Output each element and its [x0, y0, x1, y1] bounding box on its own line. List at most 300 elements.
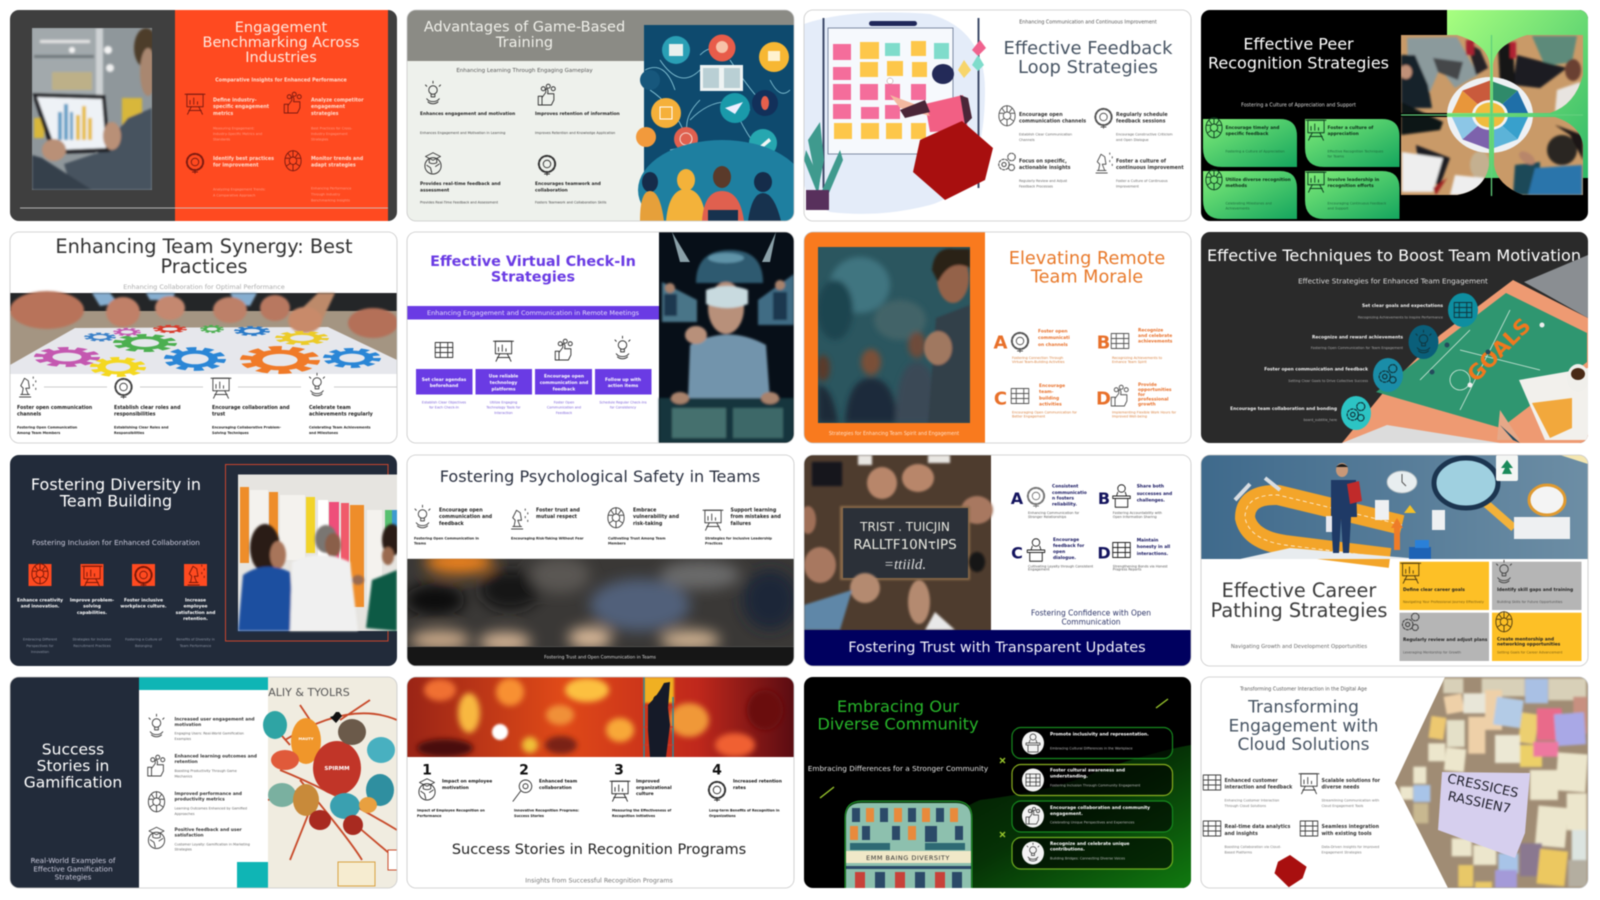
heading: Promote inclusivity and representation. — [1050, 732, 1149, 738]
heading: assessment — [420, 188, 449, 194]
item 3 — [148, 791, 247, 816]
icon: gear — [132, 564, 155, 586]
navy panel — [10, 677, 139, 888]
icon: person — [1022, 732, 1044, 754]
caption: Channels — [1019, 138, 1035, 142]
icon: panel — [1203, 775, 1221, 790]
caption: Leveraging Mentorship for Growth — [1403, 650, 1461, 654]
heading: productivity metrics — [174, 796, 225, 802]
title: Pathing Strategies — [1211, 599, 1387, 622]
item 4 — [1300, 821, 1380, 855]
photo: sticky-note wall: CRESSICES — [1446, 772, 1520, 801]
heading: and innovation. — [21, 604, 60, 610]
heading: vulnerability and — [633, 514, 680, 520]
step 2 — [513, 762, 579, 818]
caption: Open Information Sharing — [1113, 515, 1157, 519]
icon: brain — [285, 151, 301, 171]
title: Team Building — [59, 492, 172, 511]
caption: Team Performance — [179, 644, 211, 648]
heading: solving — [83, 604, 101, 610]
icon: bulb — [310, 373, 324, 396]
icon: panel — [1011, 388, 1029, 404]
illustration: mind map — [263, 677, 400, 888]
caption: Boosting Collaboration via Cloud- — [1224, 845, 1282, 849]
heading: feedback for — [1053, 543, 1085, 549]
letter: B — [1098, 489, 1110, 508]
heading: Improves retention of information — [535, 111, 620, 117]
heading: Enhances engagement and motivation — [420, 111, 515, 117]
heading: specific engagement — [213, 104, 270, 110]
heading: capabilities. — [77, 610, 107, 616]
heading: honesty in all — [1137, 544, 1171, 550]
caption: Strategies for Enhancing Team Spirit and Engagement — [829, 431, 959, 437]
item D — [1096, 382, 1177, 418]
heading: Create mentorship and — [1497, 636, 1554, 642]
icon node — [1408, 325, 1438, 359]
step: bonding — [1230, 396, 1371, 430]
caption: Impact of Employee Recognition on — [417, 808, 485, 812]
caption: Strategies — [311, 138, 329, 142]
heading: dialogue. — [1053, 555, 1076, 561]
heading: Identify best practices — [213, 156, 274, 162]
heading: professional — [1138, 396, 1169, 402]
icon: brain — [999, 106, 1015, 126]
heading: appreciation — [1328, 131, 1359, 137]
heading: Recognize — [1138, 328, 1163, 334]
caption: Responsibilities — [114, 431, 144, 435]
letter: D — [1096, 388, 1111, 410]
heading: Utilize diverse recognition — [1226, 177, 1291, 183]
caption: Innovative Recognition Programs: — [514, 808, 579, 812]
caption: Celebrating Milestones and — [1226, 202, 1272, 206]
heading: Share both — [1137, 484, 1164, 490]
caption: Enhances Engagement and Motivation in Learning — [420, 131, 505, 135]
caption: Cultivating Trust Among Team — [608, 536, 666, 540]
title: Industries — [245, 50, 317, 66]
item 2 — [1299, 774, 1381, 808]
icon: gear — [709, 782, 725, 801]
panel: cultural awareness — [1012, 764, 1172, 796]
heading: Seamless integration — [1322, 824, 1380, 830]
heading: on channels — [1038, 342, 1068, 348]
caption: Progress Reports — [1113, 568, 1142, 572]
title: Effective Career — [1222, 579, 1376, 602]
icon: panel — [1113, 542, 1130, 558]
caption: Through Cloud Solutions — [1224, 804, 1266, 808]
item 3 — [1203, 821, 1290, 855]
title: Advantages of Game-Based — [424, 20, 625, 36]
subtitle: Enhancing Learning Through Engaging Gameplay — [456, 68, 593, 74]
heading: Encourages teamwork and — [535, 181, 601, 187]
title: Team Morale — [1030, 268, 1143, 288]
caption: Measuring the Effectiveness of — [612, 808, 672, 812]
caption: Regularly Review and Adjust — [1019, 179, 1068, 183]
grey header band — [407, 10, 794, 61]
icon: panel — [1203, 821, 1221, 836]
card: Effective Career Pathing Strategies — [1201, 455, 1588, 666]
caption: Organizations — [709, 814, 736, 818]
heading: with existing tools — [1322, 831, 1372, 837]
heading: Foster a culture of — [1328, 125, 1373, 131]
card: Advantages of Game-Based Training — [406, 10, 794, 222]
column 3 — [120, 564, 167, 648]
caption: Fostering Open Communication for Team Engagement — [1311, 346, 1404, 350]
heading: Improved performance and — [174, 791, 242, 797]
caption: Technology Tools for — [485, 406, 521, 410]
caption: Interaction — [494, 411, 513, 415]
icon: board — [1306, 172, 1326, 192]
heading: n fosters — [1052, 496, 1074, 502]
illustration: mind map: ALIY & TYOLRS — [268, 686, 350, 699]
heading: Enhance creativity — [17, 598, 63, 604]
caption: Strategies — [174, 848, 192, 852]
item A — [1011, 484, 1087, 519]
caption: Practices — [705, 542, 723, 546]
heading: satisfaction and — [176, 610, 215, 616]
icon: board — [703, 510, 723, 530]
heading: engagement — [311, 104, 346, 110]
caption: Schedule Regular Check-Ins — [599, 400, 647, 404]
photo: sticky-note wall — [1395, 677, 1588, 889]
item: continuous improvement — [1096, 153, 1184, 188]
caption: Embracing Cultural Differences in the Workplace — [1050, 746, 1133, 750]
title: Enhancing Team Synergy: Best — [55, 235, 353, 258]
caption: for Each Check-In — [429, 406, 459, 410]
subtitle: Fostering Inclusion for Enhanced Collaboration — [32, 538, 200, 547]
heading: retention. — [183, 616, 208, 622]
footer bar — [804, 630, 1191, 666]
title: Success Stories in Recognition Programs — [452, 842, 746, 858]
heading: Establish clear roles and — [114, 405, 181, 411]
heading: Foster open — [1038, 328, 1067, 334]
photo: chalkboard on table: TRIST . TUICJIN — [859, 520, 950, 534]
illustration: learning network — [635, 24, 794, 222]
caption: Celebrating Unique Perspectives and Experiences — [1050, 820, 1135, 824]
item card: timely feedback — [1203, 118, 1297, 167]
title: Cloud Solutions — [1237, 735, 1370, 755]
caption: Communication and — [547, 406, 581, 410]
caption: Streamlining Communication with — [1322, 798, 1379, 802]
caption: Feedback — [556, 411, 572, 415]
caption: Utilize Engaging — [490, 400, 517, 404]
title: Gamification — [24, 774, 122, 792]
item: open communication — [17, 377, 93, 435]
caption: Effective Recognition Techniques — [1328, 149, 1383, 153]
item: open channels — [999, 106, 1086, 142]
subtitle: Comparative Insights for Enhanced Performance — [215, 78, 347, 84]
label box — [535, 369, 592, 394]
caption: Recognizing Achievements to — [1112, 356, 1162, 360]
caption: Standards — [213, 138, 230, 142]
caption: Enhancing Customer Interaction — [1224, 798, 1279, 802]
step: technology — [476, 341, 532, 415]
item: competitor strategies — [284, 92, 364, 142]
number: 1 — [422, 762, 432, 778]
card: Transforming Engagement with Cloud Solutions — [1201, 677, 1588, 889]
title: Engagement — [235, 20, 328, 36]
item 4 — [148, 827, 250, 852]
caption: Stronger Relationships — [1028, 515, 1067, 519]
card: Elevating Remote Team Morale — [804, 232, 1191, 443]
step 4 — [709, 762, 782, 818]
title: Practices — [160, 255, 248, 278]
caption: and Milestones — [309, 431, 338, 435]
heading: satisfaction — [174, 832, 204, 838]
subtitle: Embracing Differences for a Stronger Community — [808, 764, 989, 773]
subtitle: Fostering Confidence with Open — [1031, 608, 1151, 618]
caption: Fostering Open Communication in — [414, 536, 480, 540]
heading: actionable insights — [1019, 165, 1071, 171]
caption: Among Team Members — [17, 431, 60, 435]
caption: Cloud Engagement Tools — [1322, 804, 1364, 808]
subtitle: Enhancing Collaboration for Optimal Performance — [123, 283, 285, 291]
item C — [994, 383, 1078, 418]
heading: open — [1053, 550, 1065, 555]
heading: activities — [1039, 401, 1062, 407]
label: feedback — [553, 386, 575, 392]
photo: chalkboard on table: RALLTF10NτIPS — [853, 537, 957, 553]
caption: Learning Outcomes Enhanced by Gamified — [174, 806, 247, 810]
item: celebrate achievements — [309, 373, 374, 435]
caption: Embracing Different — [23, 638, 58, 642]
item: feedback sessions — [1095, 109, 1173, 142]
heading: communication channels — [1019, 119, 1086, 125]
icon: gear — [1028, 488, 1044, 507]
title: Effective Peer — [1243, 34, 1354, 54]
step: rewards — [1311, 325, 1438, 359]
caption: for Consistency — [610, 406, 636, 410]
heading: Enhanced learning outcomes and — [174, 754, 257, 760]
caption: Fostering Inclusion Through Community Engagement — [1050, 784, 1141, 788]
icon: board — [1306, 120, 1326, 140]
label: technology — [490, 380, 517, 386]
caption: and Support — [1328, 207, 1349, 211]
heading: adapt strategies — [311, 163, 356, 169]
caption: Encouraging Continuous Feedback — [1328, 202, 1386, 206]
caption: Perspectives for — [26, 644, 54, 648]
heading: Consistent — [1052, 484, 1078, 490]
heading: trust — [212, 412, 226, 418]
icon: board — [1401, 563, 1421, 583]
heading: Encourage open — [439, 508, 483, 514]
icon: board — [211, 378, 231, 398]
icon: bulb — [1496, 560, 1512, 583]
orange panel — [804, 232, 985, 443]
item card: culture of appreciation — [1305, 119, 1400, 167]
number: 2 — [519, 762, 529, 778]
photo: woman in visor — [659, 232, 794, 443]
item: define metrics — [185, 94, 270, 142]
subtitle: Effective Gamification — [33, 864, 113, 873]
card: Success Stories in Recognition Programs — [407, 677, 794, 888]
heading: specific feedback — [1226, 131, 1268, 137]
label: Use reliable — [489, 374, 518, 380]
caption: Establish Clear Communication — [1019, 132, 1072, 136]
icon: chess — [512, 509, 528, 529]
header text: Transforming Customer Interaction in the Digital Age — [1239, 686, 1367, 692]
subtitle: Fostering a Culture of Appreciation and Support — [1241, 102, 1356, 108]
caption: Encouraging Risk-Taking Without Fear — [511, 536, 584, 540]
icon: brain — [1206, 118, 1222, 138]
caption: Navigating Your Professional Journey Effectively — [1403, 600, 1484, 604]
heading: retention — [174, 759, 198, 765]
heading: Analyze competitor — [311, 98, 364, 104]
caption: Fostering Connection Through — [1012, 356, 1063, 360]
heading: collaboration — [539, 785, 572, 791]
caption: Solving Techniques — [212, 431, 249, 435]
heading: recognition efforts — [1328, 183, 1374, 189]
item: monitor trends — [285, 151, 364, 202]
icon: panel — [1300, 821, 1318, 836]
photo: team circle — [1400, 35, 1583, 196]
heading: culture — [636, 791, 654, 797]
icon: bulb — [426, 81, 440, 104]
icon: graduate — [425, 153, 441, 174]
heading: responsibilities — [114, 412, 156, 418]
heading: challenges. — [1137, 498, 1165, 504]
card: Effective Virtual Check-In Strategies — [407, 232, 794, 443]
caption: Fostering Open Communication — [17, 426, 78, 430]
icon: brain — [608, 508, 624, 528]
caption: Enhancing Performance — [311, 186, 351, 190]
icon: podium — [1113, 485, 1130, 507]
subtitle: Effective Strategies for Enhanced Team Engagement — [1298, 276, 1488, 286]
item 1 — [414, 505, 493, 546]
heading: Encourage — [1039, 383, 1065, 389]
icon: podium — [1027, 539, 1045, 561]
caption: Achievements — [1226, 207, 1250, 211]
title: Fostering Psychological Safety in Teams — [440, 467, 760, 486]
green wave — [930, 745, 1191, 888]
title: Strategies — [491, 270, 575, 286]
heading: Foster cultural awareness and — [1050, 768, 1125, 774]
card: Fostering Diversity in Team Building — [10, 455, 402, 666]
label: Follow up with — [605, 377, 641, 383]
heading: continuous improvement — [1116, 165, 1184, 171]
caption: Data-Driven Insights for Improved — [1322, 845, 1379, 849]
icon: trophy people — [1111, 385, 1128, 406]
item C — [1011, 537, 1094, 572]
caption: Analyzing Engagement Trends: — [213, 188, 266, 192]
heading: Foster open communication — [17, 405, 93, 411]
heading: and insights — [1224, 831, 1258, 837]
letter: D — [1097, 544, 1111, 562]
heading: employee — [183, 604, 208, 610]
caption: Better Engagement — [1012, 414, 1046, 418]
label box — [416, 369, 472, 394]
heading: Recognize and reward achievements — [1312, 334, 1403, 340]
caption: Improved Well-being — [1112, 414, 1147, 418]
image: diversity poster — [845, 801, 972, 888]
caption: Feedback Processes — [1019, 184, 1053, 188]
caption: Enhance Team Spirit — [1112, 360, 1147, 364]
caption: Approaches — [174, 812, 195, 816]
item: best practices — [187, 154, 274, 198]
icon: thumb — [1022, 804, 1044, 828]
photo: blurred meeting — [405, 550, 798, 652]
number: 4 — [712, 762, 722, 778]
heading: Positive feedback and user — [174, 827, 242, 833]
caption: Establishing Clear Roles and — [114, 426, 169, 430]
caption: Mechanics — [174, 774, 193, 778]
caption: Benefits of Diversity in — [176, 638, 215, 642]
item: clear roles — [114, 379, 181, 435]
icon: brain — [1496, 612, 1512, 632]
photo: pointing man — [816, 247, 970, 423]
icon: bulb — [615, 336, 630, 359]
caption: Recognition Initiatives — [612, 814, 655, 818]
panel: inclusivity — [1012, 728, 1172, 758]
item: collaboration and trust — [211, 378, 290, 435]
header text: Enhancing Communication and Continuous Improvement — [1019, 20, 1157, 26]
icon: chess — [20, 377, 36, 397]
item: engagement — [420, 81, 515, 135]
heading: Enhanced customer — [1224, 778, 1278, 784]
caption: Innovation — [31, 650, 49, 654]
heading: engagement. — [1050, 811, 1083, 817]
item 1 — [149, 714, 255, 741]
illustration: career path — [1201, 455, 1588, 559]
heading: Regularly schedule — [1116, 112, 1168, 118]
panel: collaboration — [1012, 801, 1172, 832]
icon: thumb — [284, 92, 301, 113]
card: Enhancing Team Synergy — [10, 232, 398, 443]
icon: graduate — [419, 779, 435, 800]
caption: Foster Open — [554, 400, 574, 404]
heading: Embrace — [633, 508, 657, 514]
photo: man with tablet — [32, 28, 158, 190]
icon: panel — [1111, 334, 1129, 348]
item: actionable insights — [999, 153, 1071, 188]
caption: Foster a Culture of Continuous — [1116, 179, 1168, 183]
title: Embracing Our — [837, 697, 959, 716]
subtitle: Navigating Growth and Development Opportunities — [1231, 644, 1367, 650]
heading: Foster trust and — [536, 508, 580, 514]
icon: gear — [115, 379, 132, 398]
icon: graduate — [148, 827, 165, 848]
caption: Members — [608, 542, 626, 546]
title: Engagement with — [1229, 716, 1378, 736]
card: Fostering Psychological Safety in Teams — [405, 455, 798, 666]
item B — [1098, 484, 1172, 519]
accent marks — [820, 699, 1168, 837]
teal top bar — [139, 677, 268, 690]
title: Benchmarking Across — [203, 35, 359, 51]
icon node — [1341, 396, 1371, 430]
title: Stories in — [37, 757, 109, 775]
heading: from mistakes and — [730, 514, 781, 520]
caption: Building Bridges: Connecting Diverse Voices — [1050, 856, 1125, 860]
caption: Boosting Productivity Through Game — [174, 769, 237, 773]
photo: chalkboard on table: =ttiild. — [884, 557, 926, 573]
caption: Belonging — [135, 644, 152, 648]
orange panel — [175, 10, 388, 221]
subtitle: Insights from Successful Recognition Programs — [525, 878, 673, 884]
heading: Involve leadership in — [1328, 177, 1379, 183]
heading: understanding. — [1050, 774, 1088, 780]
caption: Engaging Users: Real-World Gamification — [174, 732, 244, 736]
heading: Scalable solutions for — [1322, 778, 1381, 784]
letter: A — [994, 332, 1008, 354]
title: Effective Virtual Check-In — [430, 254, 636, 270]
icon: brain — [28, 564, 52, 586]
heading: Foster open communication and feedback — [1264, 366, 1368, 372]
heading: Maintain — [1137, 538, 1158, 544]
heading: Encourage collaboration and community — [1050, 805, 1150, 811]
caption: and Open Dialogue — [1116, 138, 1149, 142]
caption: Examples — [174, 737, 191, 741]
heading: building — [1039, 395, 1059, 401]
